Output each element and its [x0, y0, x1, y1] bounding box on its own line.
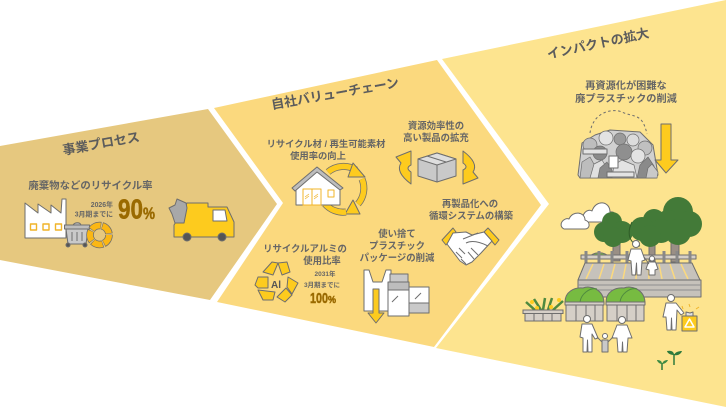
icon: box with arrows [396, 151, 478, 184]
text: recycling deadline: 2026年 [91, 200, 113, 209]
icon: wooden deck [578, 251, 701, 297]
text: reduce disposable packaging: プラスチック [369, 240, 425, 251]
number: 100 percent: 100 [310, 290, 328, 307]
text: recycled material usage: リサイクル材 / 再生可能素材 [267, 138, 385, 149]
heading: own value chain: 自社バリューチェーン [270, 75, 400, 112]
text: resource efficient products: 高い製品の拡充 [403, 132, 469, 143]
icon: dumpster [64, 223, 90, 247]
icon: aluminium recycling mark: Al [271, 280, 281, 291]
text: reduce hard-to-recycle plastic [575, 79, 678, 105]
text: aluminium deadline: 3月期までに [304, 280, 340, 289]
text: recycling rate: 廃棄物などのリサイクル率 [28, 179, 153, 192]
icon: packaging with down arrow [364, 270, 429, 323]
icon: aluminium recycling mark [255, 262, 298, 302]
text: closed-loop system: 循環システムの構築 [429, 210, 514, 221]
heading: business process: 事業プロセス [61, 129, 141, 158]
icon: flower planter [523, 298, 563, 321]
text: closed-loop system: 再製品化への [442, 198, 498, 209]
icon: recycling mark [90, 226, 109, 244]
text: recycling deadline: 3月期までに [75, 210, 113, 218]
icon: trees [594, 197, 702, 262]
number: 90 percent: % [143, 204, 155, 223]
text: reduce hard-to-recycle plastic: 廃プラスチックの削減 [575, 92, 678, 105]
text: closed-loop system [429, 198, 514, 221]
icon: garbage truck [169, 199, 234, 241]
icon: family holding hands [580, 316, 632, 352]
panel: own value chain [214, 60, 541, 347]
icon: factory [25, 199, 66, 238]
icon: handshake [442, 228, 499, 265]
icon: person recycling [663, 294, 699, 331]
heading: expanded impact: インパクトの拡大 [546, 25, 651, 62]
text: recycled aluminium ratio: リサイクルアルミの [263, 243, 347, 254]
panel: business process [0, 109, 277, 300]
text: reduce disposable packaging: 使い捨て [378, 228, 416, 239]
text: recycling deadline [75, 200, 113, 218]
text: recycled aluminium ratio [263, 243, 347, 266]
icon: clouds [561, 203, 616, 229]
icon: two people on deck [628, 240, 658, 275]
icon: house with cycle arrows [292, 163, 365, 214]
text: reduce hard-to-recycle plastic: 再資源化が困難な [585, 79, 667, 92]
icon: hedge planters [565, 287, 645, 321]
panel: expanded impact [436, 0, 726, 407]
number: 100 percent: % [328, 295, 336, 306]
text: reduce disposable packaging [360, 228, 435, 263]
icon: seedlings [657, 351, 682, 370]
text: resource efficient products [403, 120, 469, 143]
number: 90 percent: 90 [118, 194, 143, 224]
text: recycled material usage: 使用率の向上 [290, 150, 346, 161]
icon: plastic waste pile [578, 111, 658, 178]
text: aluminium deadline: 2031年 [315, 269, 336, 278]
text: reduce disposable packaging: パッケージの削減 [360, 252, 435, 263]
icon: down arrow [655, 124, 678, 173]
text: recycled aluminium ratio: 使用比率 [303, 255, 341, 266]
text: aluminium deadline [304, 269, 340, 289]
text: resource efficient products: 資源効率性の [408, 120, 464, 131]
text: recycled material usage [267, 138, 385, 161]
